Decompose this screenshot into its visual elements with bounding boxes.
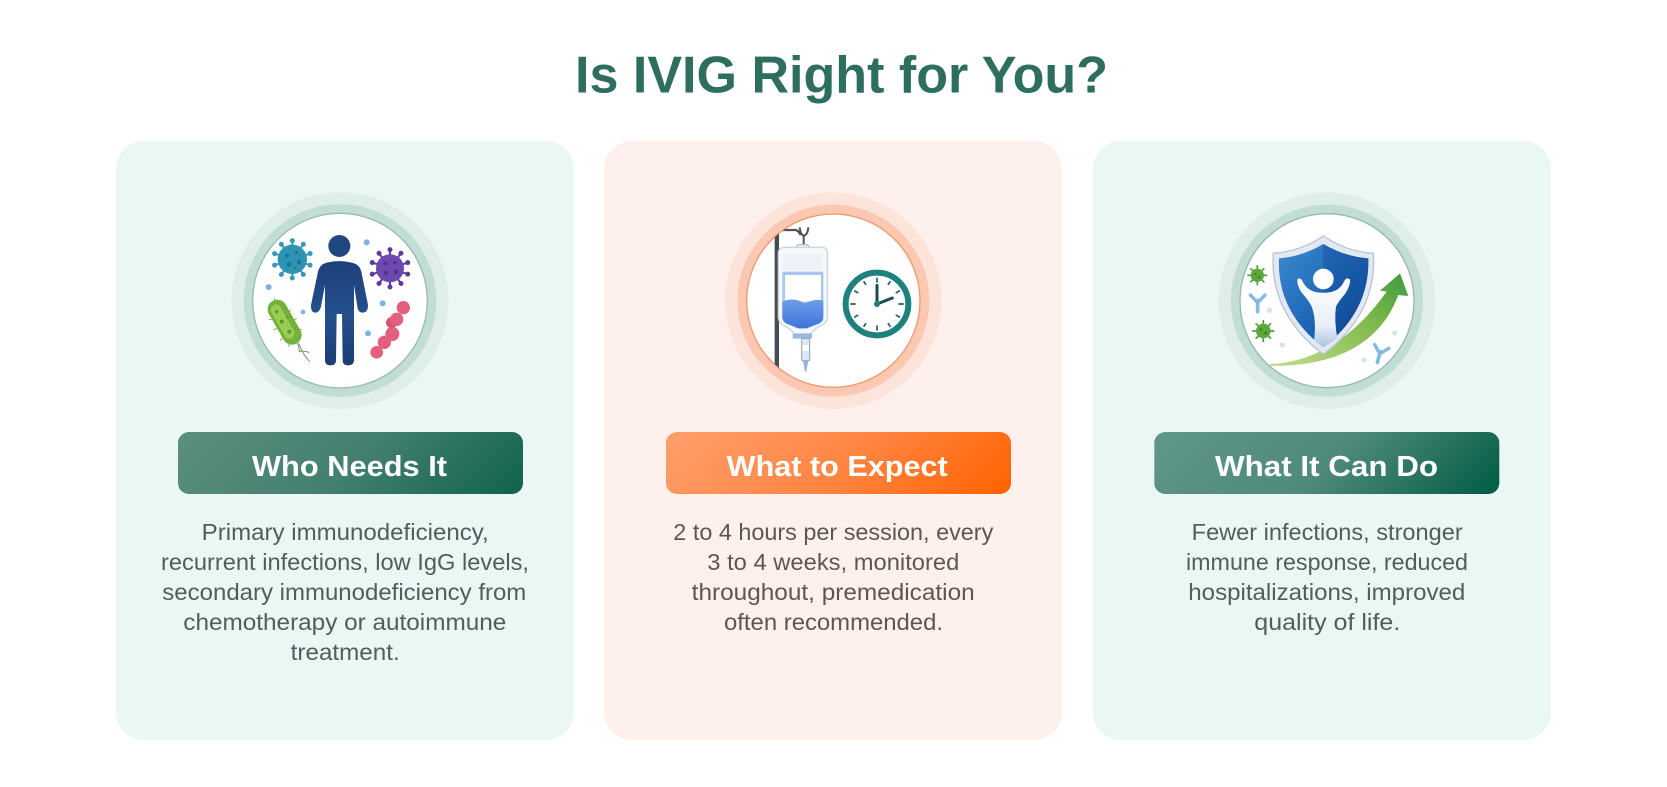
heading button: what it can do: What It Can Do (1215, 451, 1438, 483)
panel: who needs it (116, 141, 574, 740)
text block: what to expect: 2 to 4 hours per session, every (673, 519, 994, 545)
text block: who needs it: secondary immunodeficiency from (162, 579, 526, 605)
icon: shield with person and rising arrow (1219, 192, 1435, 409)
heading button: what to expect: What to Expect (727, 451, 948, 483)
text block: who needs it: chemotherapy or autoimmune (183, 609, 506, 635)
icon: person surrounded by pathogens (232, 192, 448, 409)
panel: what it can do (1093, 141, 1551, 740)
panel: what to expect (604, 141, 1062, 740)
heading button: who needs it (178, 432, 523, 494)
text block: what to expect: often recommended. (724, 609, 943, 635)
text block: who needs it: recurrent infections, low IgG levels, (161, 549, 529, 575)
heading button: what to expect (666, 432, 1011, 494)
text block: who needs it: treatment. (291, 639, 400, 665)
text block: what to expect (673, 519, 994, 635)
text block: who needs it (161, 519, 529, 665)
text block: what to expect: 3 to 4 weeks, monitored (707, 549, 959, 575)
text block: what it can do: immune response, reduced (1186, 549, 1468, 575)
text block: what it can do: Fewer infections, stronger (1192, 519, 1463, 545)
text block: what it can do: quality of life. (1254, 609, 1400, 635)
title: Is IVIG Right for You? (575, 47, 1108, 105)
text block: what it can do (1186, 519, 1468, 635)
heading button: who needs it: Who Needs It (252, 451, 447, 483)
icon: IV bag and clock (725, 192, 942, 409)
text block: what it can do: hospitalizations, improved (1188, 579, 1465, 605)
text block: what to expect: throughout, premedication (692, 579, 975, 605)
heading button: what it can do (1154, 432, 1499, 494)
text block: who needs it: Primary immunodeficiency, (202, 519, 489, 545)
